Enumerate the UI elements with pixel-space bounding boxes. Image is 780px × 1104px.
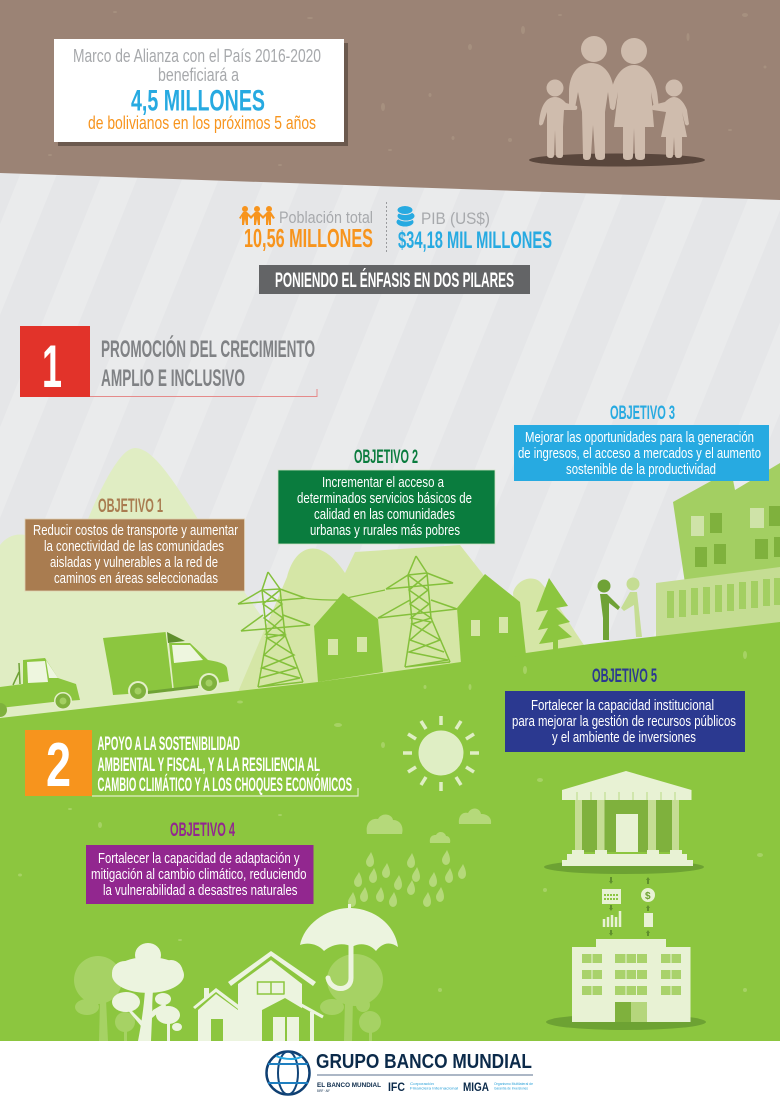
logo: institutions: EL BANCO MUNDIAL — [317, 1082, 381, 1089]
objective 2: calidad en las comunidades — [314, 507, 455, 523]
tower 2 — [378, 556, 457, 667]
label: Población total — [279, 208, 373, 227]
icon: people — [239, 206, 275, 225]
big number: 4,5 MILLONES — [131, 84, 265, 118]
icon: coins — [396, 206, 415, 227]
objective 1: aisladas y vulnerables a la red de — [50, 555, 218, 571]
icon: office building — [546, 939, 706, 1030]
icon: umbrella — [300, 904, 398, 988]
headline closing text: de bolivianos en los próximos 5 años — [88, 113, 316, 133]
objective 5: Fortalecer la capacidad institucional — [531, 698, 714, 714]
objective 5: y el ambiente de inversiones — [552, 730, 696, 746]
headline intro text: beneficiará a — [158, 65, 240, 85]
icon: pickup truck — [0, 658, 80, 717]
arrows — [609, 877, 650, 936]
pillar 2 heading: CAMBIO CLIMÁTICO Y A LOS CHOQUES ECONÓMICOS — [98, 772, 352, 796]
header band: brown — [0, 0, 780, 200]
icon: trees foreground — [112, 943, 184, 1041]
objective 4: mitigación al cambio climático, reduciendo — [91, 867, 306, 883]
objective 1 — [25, 495, 244, 591]
icon: government building — [544, 771, 704, 874]
tower 1 — [238, 572, 310, 687]
pillar 2 heading: AMBIENTAL Y FISCAL, Y A LA RESILIENCIA AL — [98, 754, 320, 776]
objective 5: OBJETIVO 5 — [592, 665, 657, 687]
factory back building — [673, 463, 780, 590]
icon: pine tree — [536, 578, 572, 652]
hills — [0, 448, 586, 725]
value: 10,56 MILLONES — [244, 225, 373, 253]
pillar 1 heading: PROMOCIÓN DEL CRECIMIENTO — [101, 335, 315, 363]
objective 4: la vulnerabilidad a desastres naturales — [103, 883, 298, 899]
objective 1: OBJETIVO 1 — [98, 495, 163, 517]
objective 4: OBJETIVO 4 — [170, 819, 235, 841]
calendar — [602, 889, 621, 904]
heading bar: two pillars: PONIENDO EL ÉNFASIS EN DOS PILARES — [275, 269, 514, 292]
logo: institutions: Corporación — [410, 1082, 434, 1086]
houses — [314, 574, 526, 682]
icons: finance flows — [602, 877, 655, 936]
objective 2: Incrementar el acceso a — [322, 475, 445, 491]
wire — [305, 590, 385, 600]
icon: sun — [403, 716, 479, 791]
icon: clouds and rain — [348, 809, 491, 907]
logo: institutions: Garantía de Inversiones — [494, 1086, 528, 1090]
objective 2: OBJETIVO 2 — [354, 446, 418, 468]
coin: $ — [645, 891, 651, 902]
person dark — [598, 580, 620, 640]
logo: institutions: Organismo Multilateral de — [494, 1082, 533, 1086]
pillar 2 heading: APOYO A LA SOSTENIBILIDAD — [98, 733, 240, 755]
pillar 1 heading — [20, 326, 317, 400]
icon: power towers — [238, 556, 457, 687]
pillar 2 heading: 2 — [46, 731, 71, 800]
label: PIB (US$) — [421, 209, 490, 228]
girl — [652, 80, 689, 158]
objective 2: determinados servicios básicos de — [297, 491, 472, 507]
boy — [539, 80, 577, 158]
logo: institutions — [317, 1080, 533, 1094]
big house — [238, 960, 302, 1041]
objective 4: Fortalecer la capacidad de adaptación y — [98, 851, 300, 867]
ground — [0, 622, 780, 1041]
headline card — [54, 39, 348, 146]
headline intro text: Marco de Alianza con el País 2016-2020 — [73, 46, 321, 66]
chart — [604, 911, 620, 927]
stats: population — [239, 206, 373, 253]
objective 2 — [278, 446, 495, 544]
background: striped gray area — [0, 170, 780, 730]
factory front building — [656, 567, 780, 637]
heading bar: two pillars — [259, 265, 530, 294]
logo: institutions: BIRF · AIF — [317, 1089, 330, 1093]
objective 2: urbanas y rurales más pobres — [310, 523, 460, 539]
objective 3: OBJETIVO 3 — [610, 402, 675, 424]
icon: handshake — [598, 578, 642, 640]
pillar 1 heading: 1 — [42, 333, 62, 400]
document — [644, 913, 653, 927]
objective 4 — [86, 819, 314, 904]
objective 5 — [505, 665, 745, 752]
objective 1: la conectividad de las comunidades — [44, 539, 224, 555]
objective 3 — [514, 402, 769, 481]
logo: institutions: MIGA — [463, 1080, 489, 1094]
icon: delivery truck — [103, 632, 229, 701]
pillar 2 heading — [25, 730, 358, 800]
logo: globe — [266, 1052, 310, 1094]
small house — [198, 994, 238, 1041]
person light — [621, 578, 642, 637]
pillar 1 heading: AMPLIO E INCLUSIVO — [101, 365, 245, 392]
objective 1: Reducir costos de transporte y aumentar — [33, 523, 238, 539]
house 2 — [457, 574, 526, 664]
ground speckles — [18, 651, 763, 992]
headline intro text — [73, 46, 321, 85]
icon: background trees — [74, 954, 383, 1041]
icon: family — [529, 36, 705, 166]
factory — [656, 463, 780, 637]
icon: houses — [193, 951, 323, 1041]
logo: institutions: IFC — [388, 1080, 405, 1094]
logo: institutions: Financiera Internacional — [410, 1086, 458, 1090]
logo: name: GRUPO BANCO MUNDIAL — [316, 1051, 532, 1073]
woman — [611, 38, 659, 160]
objective 1: caminos en áreas seleccionadas — [54, 571, 218, 587]
objective 3: sostenible de la productividad — [566, 462, 716, 478]
footer — [0, 1041, 780, 1104]
man — [569, 36, 615, 160]
stats: GDP — [396, 206, 552, 254]
house 1 — [314, 593, 383, 682]
value: $34,18 MIL MILLONES — [398, 227, 552, 254]
